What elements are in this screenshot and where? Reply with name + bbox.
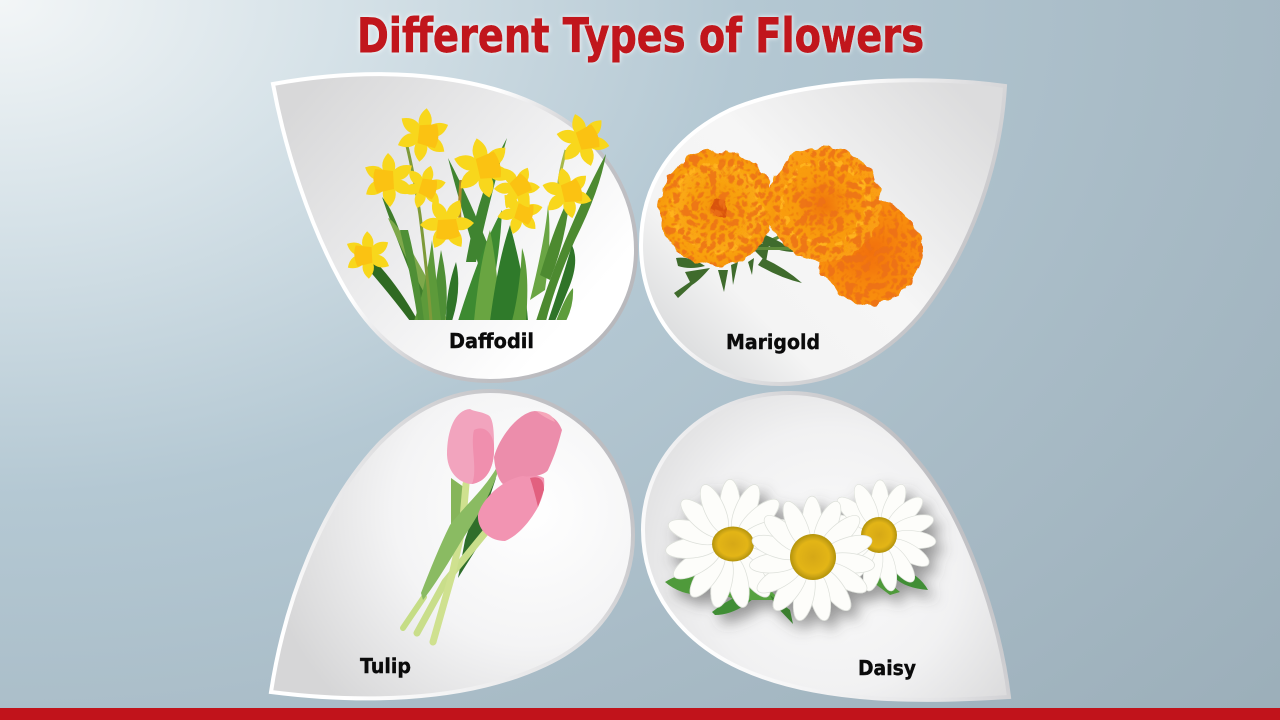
panel: daisy	[643, 393, 1009, 700]
petal shape: daffodil	[273, 74, 636, 381]
label: marigold: Marigold	[726, 330, 820, 354]
label: tulip: Tulip	[360, 654, 411, 678]
daisy leaves	[665, 568, 928, 624]
title: Different Types of Flowers	[357, 9, 924, 64]
label: daisy: Daisy	[858, 656, 916, 680]
illustration: daffodil bunch	[344, 104, 616, 321]
petal shape: marigold	[641, 80, 1005, 384]
footer bar	[0, 708, 1280, 720]
illustration: marigold leaves	[674, 226, 802, 298]
panel: marigold	[641, 80, 1005, 384]
label: daffodil: Daffodil	[449, 329, 534, 353]
petal shape: tulip	[271, 391, 633, 698]
illustration: daisy cluster	[665, 479, 937, 624]
petal shape: daisy	[643, 393, 1009, 700]
illustration: marigold blooms	[659, 147, 922, 304]
daisy flowers	[665, 479, 937, 622]
panel: daffodil	[273, 74, 636, 381]
illustration: tulip bouquet	[403, 409, 562, 642]
tulip buds	[447, 409, 562, 541]
panel: tulip	[271, 391, 633, 698]
daffodil blooms	[344, 104, 616, 279]
